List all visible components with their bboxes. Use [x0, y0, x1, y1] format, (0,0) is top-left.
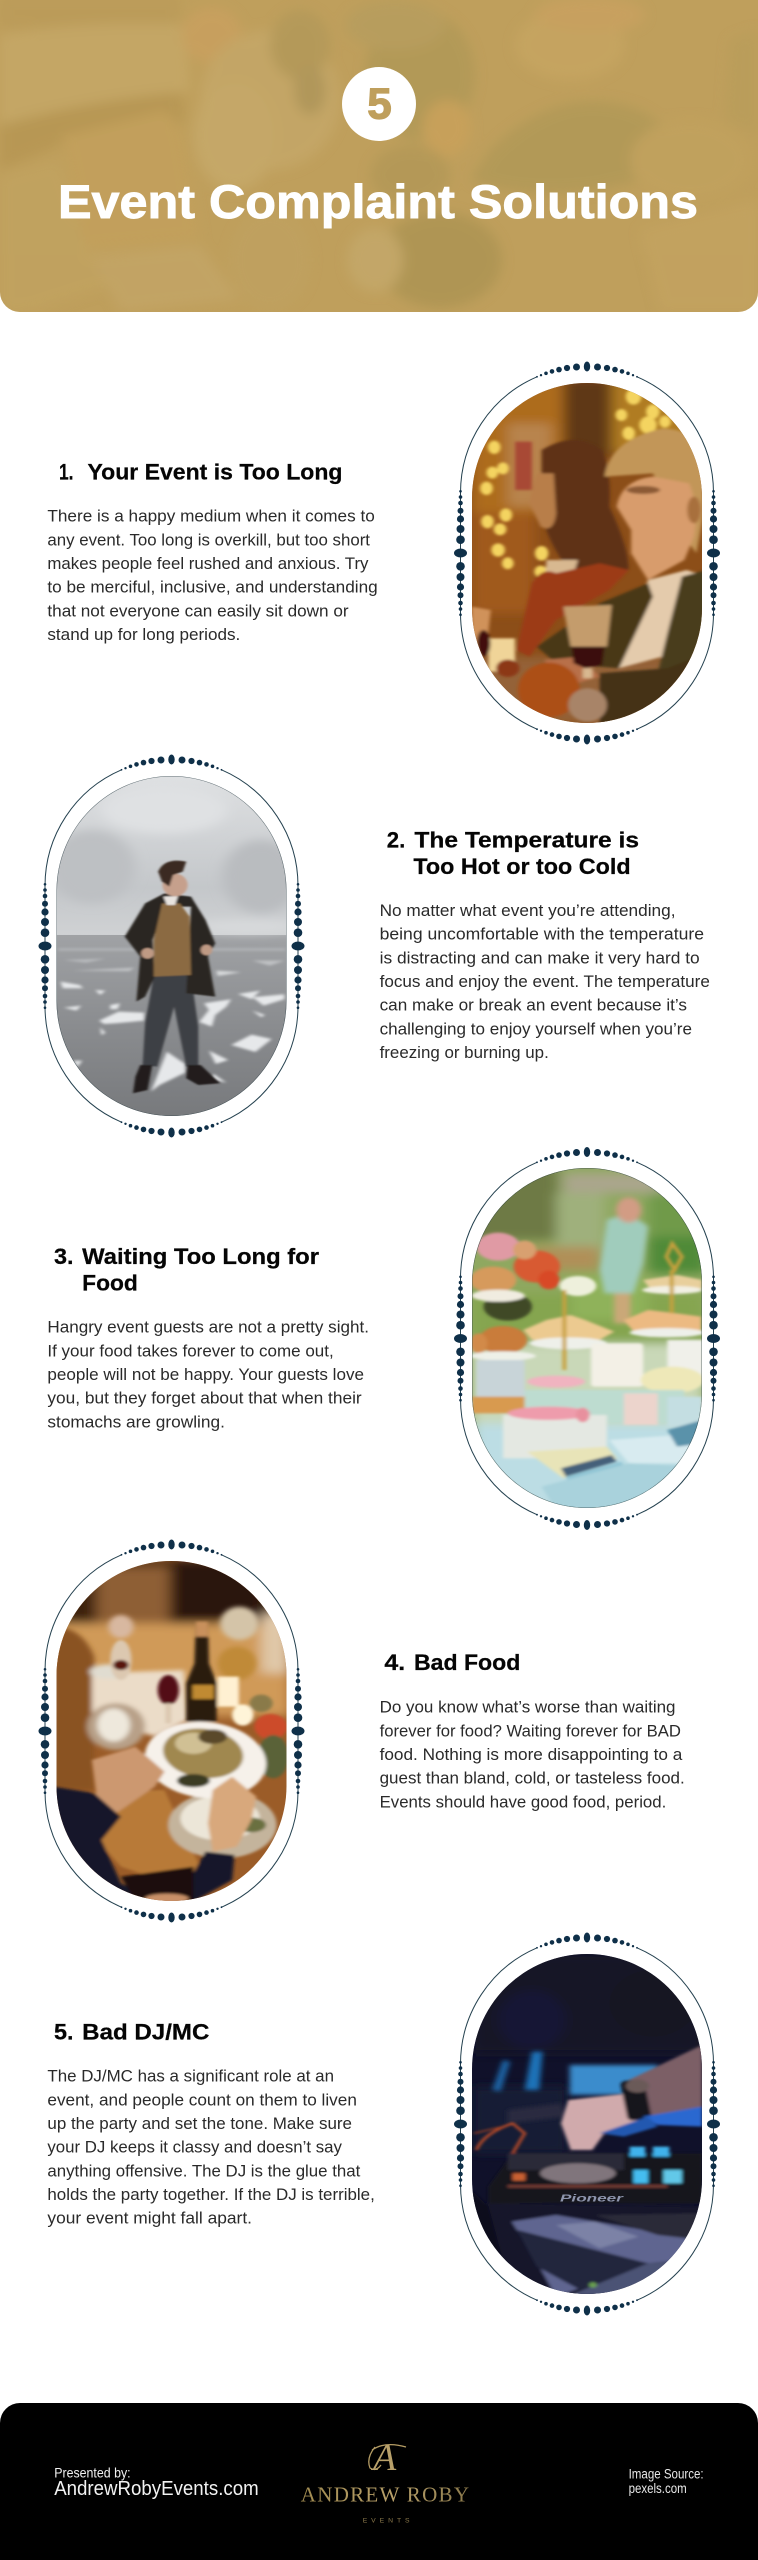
logo: Andrew Roby Events: ANDREW ROBY [301, 2482, 469, 2506]
hand and arm [629, 2045, 702, 2120]
body text 4: Events should have good food, period. [380, 1793, 666, 1811]
panel: section 5 text [47, 2019, 375, 2228]
body text 5: holds the party together. If the DJ is terrible, [47, 2186, 375, 2204]
body text 1 [47, 508, 378, 644]
body text 4: Do you know what’s worse than waiting [380, 1699, 676, 1717]
controller [488, 2153, 702, 2203]
body text 5: your event might fall apart. [47, 2210, 252, 2228]
photo: man on frozen lake [48, 773, 300, 1118]
body text 2: challenging to enjoy yourself when you’re [380, 1020, 692, 1038]
body text 2: is distracting and can make it very hard to [380, 949, 700, 967]
glass [563, 605, 612, 647]
heading 4: Bad Food [414, 1650, 520, 1675]
lower wood table [73, 1790, 203, 1887]
body text 4: forever for food? Waiting forever for BAD [380, 1722, 681, 1740]
heading 3 [54, 1244, 319, 1296]
candles [218, 1677, 239, 1707]
body text 1: There is a happy medium when it comes to [47, 508, 375, 526]
hands [92, 1747, 164, 1813]
monogram: A [370, 2437, 397, 2479]
glass [158, 1675, 179, 1705]
body text 1: to be merciful, inclusive, and understanding [47, 579, 378, 597]
presented by: Presented by: [54, 2466, 131, 2481]
person [600, 1216, 648, 1293]
panel: section 4 photo frame [38, 1540, 304, 1922]
photo: plated dinner at table [53, 1560, 290, 1903]
heading 3: 3. [54, 1244, 74, 1269]
panel: section 4 text [380, 1650, 685, 1811]
sleeves [56, 1785, 134, 1894]
heading 4: 4. [384, 1650, 405, 1675]
body text 5: up the party and set the tone. Make sure [47, 2115, 352, 2133]
candle and pumpkin [488, 638, 515, 672]
pink boxes [503, 1415, 607, 1458]
body text 1: stand up for long periods. [47, 626, 240, 644]
heading 3: Food [82, 1271, 138, 1296]
image source: Image Source: [629, 2467, 704, 2482]
sweater [154, 903, 191, 977]
body text 4: food. Nothing is more disappointing to a [380, 1746, 683, 1764]
panel: footer [0, 2403, 758, 2560]
body text 5: event, and people count on them to liven [47, 2091, 357, 2109]
title: Event Complaint Solutions [58, 175, 698, 228]
ornate ring [38, 1540, 304, 1922]
photo: DJ at mixing controller [472, 1953, 704, 2297]
monogram [369, 2437, 406, 2479]
tiers [523, 1315, 614, 1340]
flowers [476, 1233, 520, 1261]
bottle [186, 1622, 217, 1722]
photo: outdoor dessert buffet [470, 1167, 706, 1510]
panel: section 1 photo frame [454, 362, 720, 744]
panel: section 2 text [380, 827, 710, 1062]
body text 5: your DJ keeps it classy and doesn’t say [47, 2139, 343, 2157]
heading 2: 2. [387, 827, 405, 852]
logo: Andrew Roby Events: EVENTS [363, 2518, 410, 2525]
ornate ring [38, 754, 304, 1138]
trousers [143, 975, 198, 1067]
ornate ring [454, 1932, 720, 2316]
presented by: AndrewRobyEvents.com [54, 2478, 259, 2500]
cupcake & stand [470, 1267, 516, 1293]
ornate ring [454, 1147, 720, 1530]
boots [133, 1065, 152, 1093]
heading 5: Bad DJ/MC [82, 2019, 209, 2044]
panel: section 5 photo frame [454, 1932, 720, 2316]
heading 2: The Temperature is [414, 827, 639, 852]
heading 2 [387, 827, 639, 879]
logo: Andrew Roby Events [301, 2437, 469, 2525]
body text 2: being uncomfortable with the temperature [380, 926, 704, 944]
flowers [254, 1714, 287, 1739]
heading 1: Your Event is Too Long [88, 459, 342, 484]
heading 1: 1. [59, 459, 74, 484]
laptop [472, 2203, 702, 2297]
body text 3 [47, 1319, 369, 1431]
heading 2: Too Hot or too Cold [413, 854, 631, 879]
tray [527, 1447, 617, 1478]
heading 5: 5. [54, 2019, 74, 2044]
photo: DJ at mixing controller: Pioneer [560, 2193, 624, 2204]
body text 4: guest than bland, cold, or tasteless food. [380, 1770, 685, 1788]
body text 2: can make or break an event because it’s [380, 997, 687, 1015]
body text 4 [380, 1699, 685, 1811]
body text 5: anything offensive. The DJ is the glue that [47, 2162, 361, 2180]
body text 3: stomachs are growling. [47, 1413, 225, 1431]
image source: pexels.com [629, 2481, 687, 2496]
blonde woman [604, 428, 704, 553]
right lower [598, 662, 688, 722]
header background photo tint [0, 0, 758, 312]
coat [125, 893, 215, 1002]
panel: section 3 text [47, 1244, 369, 1431]
body text 1: makes people feel rushed and anxious. Try [47, 555, 369, 573]
panel: header banner [0, 0, 758, 312]
body text 2: focus and enjoy the event. The temperature [380, 973, 710, 991]
badge circle with number 5: 5 [367, 80, 392, 128]
ornate ring [454, 362, 720, 744]
body text 5 [47, 2068, 375, 2228]
photo: guests at dinner table [472, 380, 706, 727]
main plate [142, 1718, 270, 1800]
body text 2: freezing or burning up. [380, 1044, 549, 1062]
presented by [54, 2466, 259, 2500]
body text 3: If your food takes forever to come out, [47, 1342, 334, 1360]
body text 1: that not everyone can easily sit down or [47, 602, 349, 620]
woman back [542, 440, 629, 573]
cups [525, 1390, 684, 1423]
body text 2: No matter what event you’re attending, [380, 902, 676, 920]
body text 3: Hangry event guests are not a pretty sight. [47, 1319, 369, 1337]
panel: section 3 photo frame [454, 1147, 720, 1530]
body text 3: you, but they forget about that when their [47, 1390, 362, 1408]
napkins [591, 1343, 643, 1387]
heading 3: Waiting Too Long for [82, 1244, 319, 1269]
head [162, 874, 188, 896]
panel: section 1 text [47, 459, 378, 644]
lower plate [168, 1792, 277, 1858]
badge circle with number 5 [342, 67, 416, 141]
panel: section 2 photo frame [38, 754, 304, 1138]
body text 5: The DJ/MC has a significant role at an [47, 2068, 334, 2086]
body text 1: any event. Too long is overkill, but too short [47, 531, 370, 549]
body text 2 [380, 902, 710, 1062]
footer background [0, 2403, 758, 2560]
body text 3: people will not be happy. Your guests love [47, 1366, 364, 1384]
image source [629, 2467, 704, 2496]
